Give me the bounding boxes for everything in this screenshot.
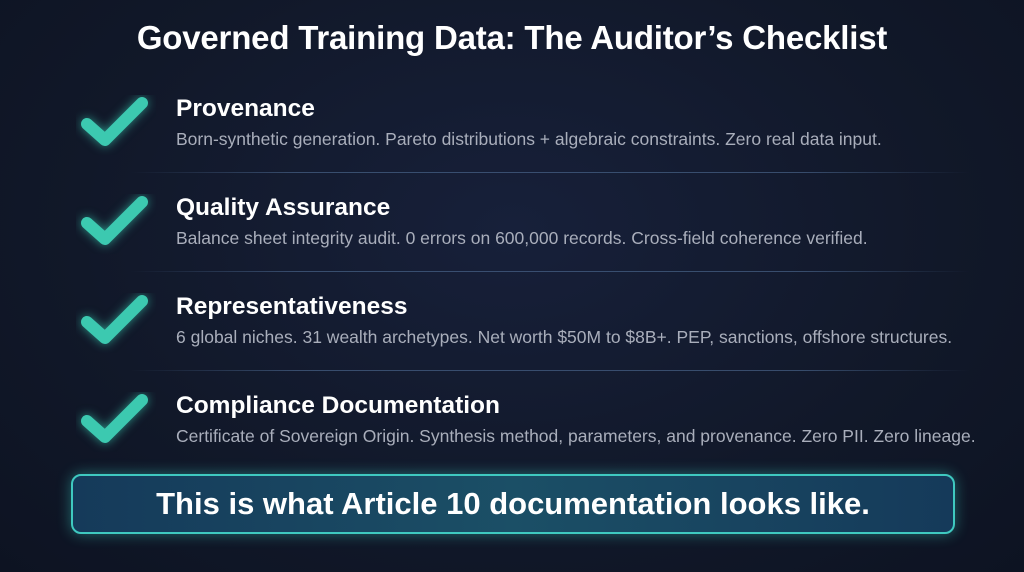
callout banner	[71, 474, 955, 534]
row: representativeness	[76, 293, 952, 350]
description: Born-synthetic generation. Pareto distributions + algebraic constraints. Zero real data input.	[176, 129, 882, 149]
heading: Representativeness	[176, 293, 408, 320]
heading: Provenance	[176, 95, 315, 122]
heading: Quality Assurance	[176, 194, 390, 221]
icon: checkmark	[76, 293, 154, 350]
description: Balance sheet integrity audit. 0 errors on 600,000 records. Cross-field coherence verified.	[176, 228, 868, 248]
heading: Compliance Documentation	[176, 392, 500, 419]
row: quality assurance	[76, 194, 868, 250]
row: compliance documentation	[76, 392, 976, 448]
row: provenance	[76, 95, 882, 152]
description: Certificate of Sovereign Origin. Synthesis method, parameters, and provenance. Zero PII. Zero lineage.	[176, 426, 976, 446]
callout banner: This is what Article 10 documentation looks like.	[156, 486, 870, 521]
icon: checkmark	[76, 194, 154, 250]
title: Governed Training Data: The Auditor’s Checklist	[137, 19, 887, 56]
icon: checkmark	[76, 392, 154, 448]
description: 6 global niches. 31 wealth archetypes. Net worth $50M to $8B+. PEP, sanctions, offshore structures.	[176, 327, 952, 347]
icon: checkmark	[76, 95, 154, 152]
